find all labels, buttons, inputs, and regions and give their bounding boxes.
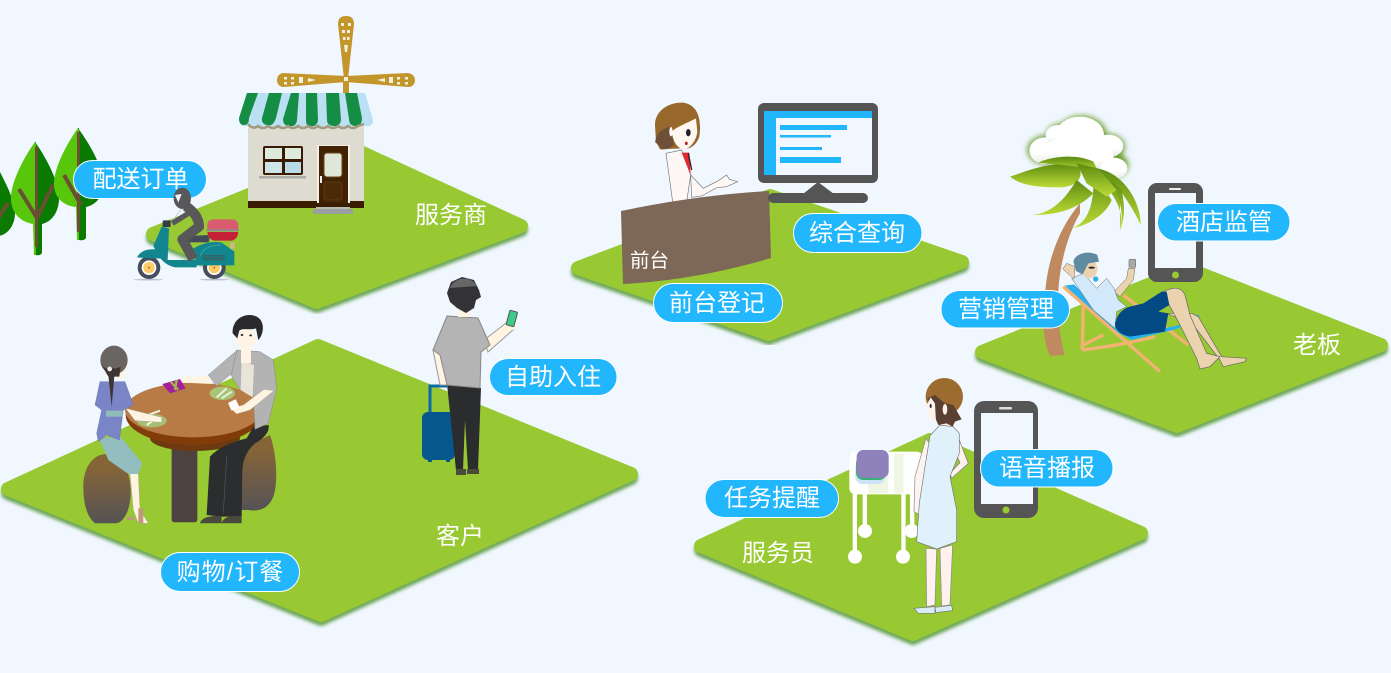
illustration: clouds and palm xyxy=(1010,116,1141,356)
plates and gift xyxy=(137,379,239,427)
man xyxy=(182,315,277,523)
pill: voice announcement xyxy=(980,450,1113,487)
stool left xyxy=(83,454,131,523)
panel: boss platform xyxy=(982,269,1381,430)
icon: shop door xyxy=(317,145,350,203)
palm leaves xyxy=(1010,157,1141,231)
illustration: boss on deck chair xyxy=(1063,253,1247,372)
label: customer: 客户 xyxy=(436,523,484,550)
awning xyxy=(239,93,373,128)
icon: boss phone xyxy=(1148,183,1203,282)
pill: delivery orders: 配送订单 xyxy=(92,166,188,193)
woman xyxy=(95,346,162,523)
illustration: man with suitcase xyxy=(422,277,518,475)
illustration: service cart xyxy=(848,450,923,564)
clouds xyxy=(1027,116,1128,179)
icon: windmill xyxy=(277,16,415,96)
palm trunk xyxy=(1043,203,1080,356)
pill: shopping / ordering: 购物/订餐 xyxy=(177,559,284,586)
panel: service provider platform xyxy=(153,151,521,306)
label: service provider: 服务商 xyxy=(415,202,487,229)
pill: self check-in xyxy=(490,358,617,396)
pill: task reminder xyxy=(705,480,838,518)
pill: task reminder: 任务提醒 xyxy=(724,485,820,512)
label: attendant: 服务员 xyxy=(742,540,814,567)
icon: shop house xyxy=(239,93,373,214)
pill: hotel monitoring xyxy=(1158,204,1290,241)
pill: marketing management: 营销管理 xyxy=(958,296,1054,323)
icon: trees xyxy=(0,128,103,255)
pill: general query xyxy=(794,214,922,252)
panel: reception desk xyxy=(621,191,771,284)
table xyxy=(125,383,262,522)
pill: hotel monitoring: 酒店监管 xyxy=(1176,209,1272,236)
pill: self check-in: 自助入住 xyxy=(505,364,601,391)
illustration: receptionist xyxy=(655,103,738,202)
panel: front desk platform xyxy=(578,196,962,338)
pill: marketing management xyxy=(941,290,1070,328)
panel: attendant platform xyxy=(701,440,1141,638)
panel: customer platform xyxy=(8,346,631,619)
illustration: attendant woman xyxy=(914,378,968,613)
icon: shop window xyxy=(259,146,306,178)
illustration: couple at table xyxy=(83,315,277,523)
pill: front desk registration xyxy=(654,284,782,322)
icon: attendant phone xyxy=(974,401,1038,518)
stool right xyxy=(225,435,276,511)
label: front desk: 前台 xyxy=(630,250,669,272)
icon: scooter and rider xyxy=(134,188,239,280)
pill: delivery orders xyxy=(74,160,206,198)
label: boss: 老板 xyxy=(1293,332,1341,359)
icon: monitor xyxy=(758,103,878,203)
pill: voice announcement: 语音播报 xyxy=(999,455,1095,482)
pill: general query: 综合查询 xyxy=(809,220,905,247)
pill: shopping / ordering xyxy=(160,552,300,592)
pill: front desk registration: 前台登记 xyxy=(669,290,765,317)
